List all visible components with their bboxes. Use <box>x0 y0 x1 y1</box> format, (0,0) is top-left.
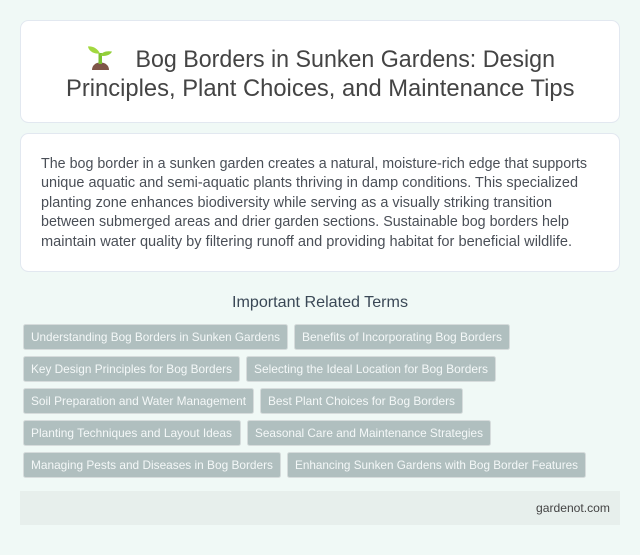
heading: related terms: Important Related Terms <box>232 294 408 311</box>
description text: between submerged areas and drier garden sections. Sustainable bog borders help <box>41 213 569 230</box>
tag: Soil Preparation and Water Management <box>31 394 247 408</box>
title: Principles, Plant Choices, and Maintenance Tips <box>66 75 574 102</box>
tag <box>24 452 280 478</box>
tag: Key Design Principles for Bog Borders <box>31 362 232 376</box>
tag <box>248 420 490 446</box>
tag <box>260 388 462 414</box>
tag: Enhancing Sunken Gardens with Bog Border Features <box>295 458 578 472</box>
footer: gardenot.com <box>536 501 610 515</box>
tag <box>294 324 510 350</box>
tag <box>288 452 586 478</box>
tag: Understanding Bog Borders in Sunken Gardens <box>31 330 280 344</box>
tag <box>246 356 496 382</box>
tag: Best Plant Choices for Bog Borders <box>268 394 455 408</box>
tag <box>24 420 240 446</box>
description text: maintain water quality by filtering runoff and providing habitat for beneficial wildlife. <box>41 233 572 250</box>
description text: unique aquatic and semi-aquatic plants thriving in damp conditions. This specialized <box>41 174 578 191</box>
description text <box>41 155 587 250</box>
description text: The bog border in a sunken garden creates a natural, moisture-rich edge that supports <box>41 155 587 172</box>
tag: Planting Techniques and Layout Ideas <box>31 426 232 440</box>
tag: Selecting the Ideal Location for Bog Borders <box>254 362 488 376</box>
tag: Managing Pests and Diseases in Bog Borders <box>31 458 273 472</box>
tag <box>24 388 254 414</box>
title: Bog Borders in Sunken Gardens: Design <box>136 46 555 73</box>
panel: description <box>20 134 620 272</box>
description text: planting zone enhances biodiversity while serving as a visually striking transition <box>41 194 552 211</box>
icon: seedling <box>88 46 112 70</box>
tag: Benefits of Incorporating Bog Borders <box>302 330 502 344</box>
title <box>66 46 574 102</box>
tag list <box>24 324 586 478</box>
tag: Seasonal Care and Maintenance Strategies <box>255 426 483 440</box>
panel: title card <box>20 20 620 122</box>
tag <box>24 324 288 350</box>
footer <box>20 491 620 525</box>
tag <box>24 356 240 382</box>
